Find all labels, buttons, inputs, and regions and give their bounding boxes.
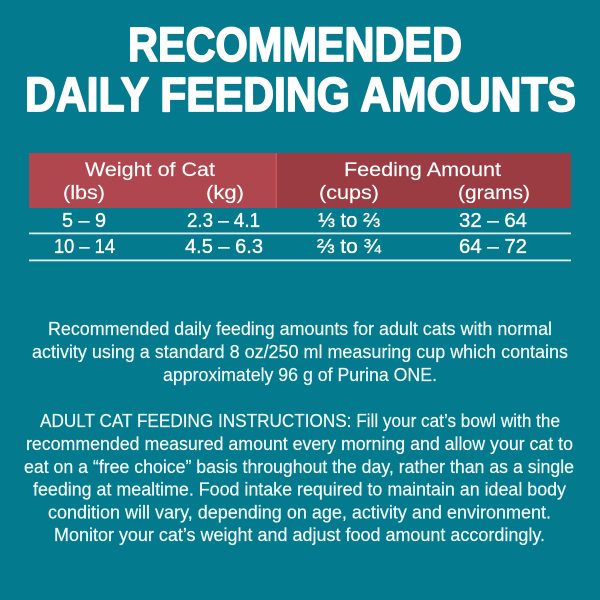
row: 10 to 14 lbs — [54, 236, 527, 258]
row: 10 to 14 lbs: 64 – 72 — [459, 236, 527, 258]
text block: feeding instructions: recommended measured amount every morning and allow your cat to — [26, 433, 573, 454]
text block: recommended amounts note: Recommended daily feeding amounts for adult cats with normal — [48, 318, 552, 339]
text block: recommended amounts note: activity using a standard 8 oz/250 ml measuring cup which contains — [32, 341, 568, 362]
text block: recommended amounts note — [32, 318, 568, 385]
header: weight of cat: (kg) — [206, 183, 244, 204]
text block: feeding instructions: ADULT CAT FEEDING INSTRUCTIONS: Fill your cat’s bowl with the — [40, 410, 560, 431]
title — [25, 19, 576, 122]
text block: feeding instructions: eat on a “free choice” basis throughout the day, rather than as a single — [24, 456, 574, 477]
text block: feeding instructions — [24, 410, 574, 545]
header: feeding amount: (cups) — [319, 183, 379, 204]
text block: recommended amounts note: approximately 96 g of Purina ONE. — [163, 364, 437, 385]
feeding table — [29, 153, 571, 261]
header: feeding amount: Feeding Amount — [344, 160, 502, 181]
title: RECOMMENDED — [128, 19, 462, 72]
text block: feeding instructions: condition will vary, depending on age, activity and environment. — [48, 502, 551, 522]
row: 10 to 14 lbs: 4.5 – 6.3 — [185, 236, 263, 258]
row: 5 to 9 lbs: ⅓ to ⅔ — [318, 210, 380, 232]
header: feeding amount — [277, 153, 571, 208]
row: 5 to 9 lbs: 32 – 64 — [459, 210, 527, 232]
text block: feeding instructions: Monitor your cat’s weight and adjust food amount accordingly. — [54, 524, 545, 545]
row: 5 to 9 lbs: 2.3 – 4.1 — [187, 210, 260, 232]
header: weight of cat — [29, 153, 277, 208]
text block: feeding instructions: feeding at mealtime. Food intake required to maintain an ideal body — [33, 478, 567, 500]
row: 5 to 9 lbs — [62, 210, 527, 232]
row: 10 to 14 lbs: ⅔ to ¾ — [317, 236, 381, 258]
row: 10 to 14 lbs: 10 – 14 — [54, 236, 115, 258]
row: 5 to 9 lbs: 5 – 9 — [62, 210, 106, 232]
header: weight of cat: (lbs) — [63, 183, 105, 204]
header: feeding amount: (grams) — [458, 183, 530, 204]
header: weight of cat: Weight of Cat — [85, 160, 216, 181]
